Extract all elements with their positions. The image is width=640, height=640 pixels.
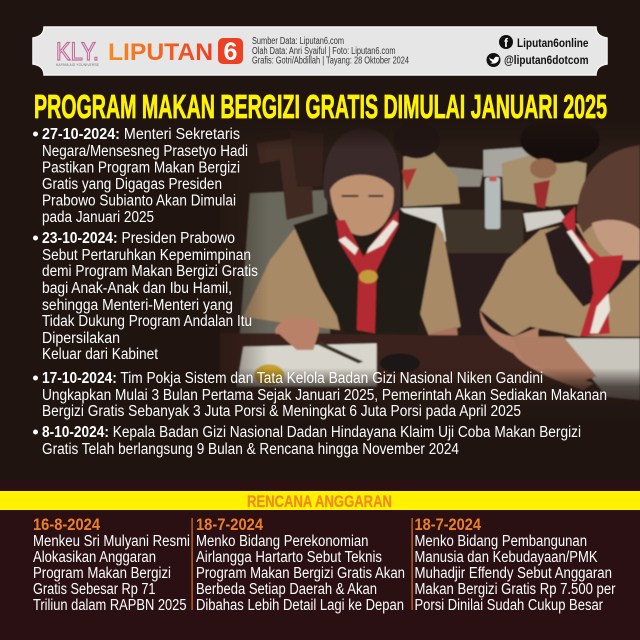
social: facebook [499, 35, 589, 50]
Liputan6 logo: 6 [224, 38, 237, 66]
budget column 18-7-2024 Muhadjir: 18-7-2024 [414, 516, 482, 534]
budget column 16-8-2024: 16-8-2024 [33, 516, 101, 534]
source credits [252, 36, 409, 66]
timeline entry 27-10-2024: Pastikan Program Makan Bergizi [42, 160, 240, 176]
budget column 16-8-2024: Menkeu Sri Mulyani Resmi [33, 533, 190, 550]
KLY logo: KAPANLAGI YOUNIVERSE [56, 63, 100, 67]
budget column 16-8-2024: Program Makan Bergizi [33, 565, 171, 582]
budget column 18-7-2024 Airlangga: 18-7-2024 [196, 516, 264, 534]
photo: students eating school meal [0, 117, 640, 485]
social: facebook: Liputan6online [517, 36, 589, 50]
timeline entry 23-10-2024: demi Program Makan Bergizi Gratis [42, 263, 258, 280]
timeline entry 8-10-2024: Gratis Telah berlangsung 9 Bulan & Rencana hingga November 2024 [42, 441, 459, 458]
budget column 16-8-2024 [33, 516, 190, 614]
timeline entry 8-10-2024: 8-10-2024: Kepala Badan Gizi Nasional Dadan Hindayana Klaim Uji Coba Makan Bergizi [42, 424, 581, 441]
timeline entry 23-10-2024: Sebut Pertaruhkan Kepemimpinan [42, 247, 251, 264]
timeline entry 17-10-2024 [33, 370, 607, 420]
timeline entry 17-10-2024: 17-10-2024: Tim Pokja Sistem dan Tata Kelola Badan Gizi Nasional Niken Gandini [42, 370, 543, 387]
budget heading band: RENCANA ANGGARAN [247, 493, 392, 511]
budget column 18-7-2024 Airlangga: Dibahas Lebih Detail Lagi ke Depan [196, 597, 404, 614]
timeline entry 17-10-2024: Bergizi Gratis Sebanyak 3 Juta Porsi & Meningkat 6 Juta Porsi pada April 2025 [42, 403, 521, 420]
budget column 16-8-2024: Alokasikan Anggaran [33, 549, 156, 566]
timeline entry 23-10-2024: bagi Anak-Anak dan Ibu Hamil, [42, 280, 232, 297]
timeline entry 23-10-2024: Keluar dari Kabinet [42, 346, 159, 363]
source credits: Sumber Data: Liputan6.com [252, 36, 344, 47]
social: twitter: @liputan6dotcom [504, 53, 588, 67]
banner plate [33, 27, 607, 75]
timeline entry 27-10-2024: pada Januari 2025 [42, 209, 154, 226]
timeline entry 27-10-2024: Negara/Mensesneg Prasetyo Hadi [42, 143, 248, 160]
source credits: Grafis: Gotri/Abdillah | Tayang: 28 Oktober 2024 [252, 56, 409, 66]
budget heading band [0, 491, 640, 511]
timeline entry 27-10-2024: Prabowo Subianto Akan Dimulai [42, 192, 236, 210]
budget column 18-7-2024 Muhadjir: Manusia dan Kebudayaan/PMK [414, 549, 598, 566]
budget column 18-7-2024 Airlangga: Airlangga Hartarto Sebut Teknis [196, 549, 382, 566]
timeline entry 27-10-2024 [33, 126, 248, 226]
KLY logo: KLY. [56, 38, 99, 66]
header banner [33, 27, 607, 75]
timeline entry 27-10-2024: 27-10-2024: Menteri Sekretaris [42, 126, 240, 143]
Liputan6 logo: LIPUTAN [108, 39, 213, 66]
timeline entry 23-10-2024: Tidak Dukung Program Andalan Itu [42, 313, 252, 330]
budget column 18-7-2024 Airlangga: Berbeda Setiap Daerah & Akan [196, 581, 377, 598]
timeline entry 23-10-2024: sehingga Menteri-Menteri yang [42, 297, 233, 314]
budget column 18-7-2024 Muhadjir: Porsi Dinilai Sudah Cukup Besar [414, 597, 603, 614]
budget column 16-8-2024: Triliun dalam RAPBN 2025 [33, 597, 186, 614]
timeline entry 23-10-2024: Dipersilakan [42, 330, 120, 347]
social: facebook: f [504, 36, 509, 50]
budget panel [0, 480, 640, 640]
budget column 16-8-2024: Gratis Sebesar Rp 71 [33, 581, 156, 598]
budget column 18-7-2024 Airlangga: Menko Bidang Perekonomian [196, 533, 368, 550]
budget column 18-7-2024 Muhadjir: Muhadjir Effendy Sebut Anggaran [414, 565, 612, 582]
budget column 18-7-2024 Muhadjir: Menko Bidang Pembangunan [414, 533, 587, 550]
timeline entry 8-10-2024 [33, 424, 581, 458]
source credits: Olah Data: Anri Syaiful | Foto: Liputan6.com [252, 46, 396, 57]
budget column 18-7-2024 Airlangga: Program Makan Bergizi Gratis Akan [196, 565, 405, 582]
budget column 18-7-2024 Muhadjir [412, 516, 616, 614]
timeline entry 27-10-2024: Gratis yang Digagas Presiden [42, 176, 222, 193]
timeline entry 23-10-2024: 23-10-2024: Presiden Prabowo [42, 230, 235, 247]
budget column 18-7-2024 Airlangga [192, 516, 405, 614]
timeline entry 23-10-2024 [33, 230, 258, 363]
